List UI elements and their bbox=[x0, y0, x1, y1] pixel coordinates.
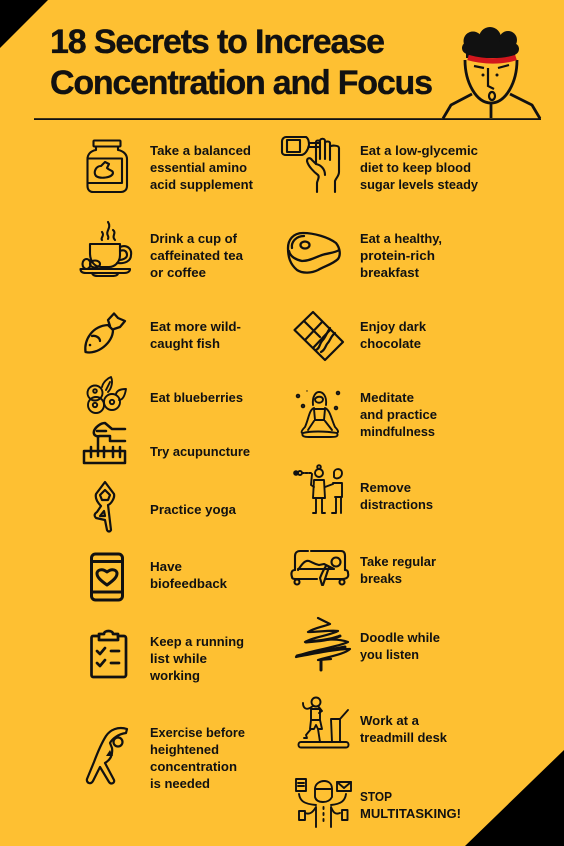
text: Work at a bbox=[360, 713, 420, 728]
text: diet to keep blood bbox=[360, 160, 471, 175]
icon: woman on treadmill bbox=[298, 698, 348, 748]
title: Concentration and Focus bbox=[50, 64, 433, 102]
corner triangle top left bbox=[0, 0, 48, 48]
tip: blueberries bbox=[88, 377, 243, 413]
tip: amino acid supplement bbox=[88, 140, 254, 192]
text: Drink a cup of bbox=[150, 231, 238, 246]
text: Practice yoga bbox=[150, 502, 237, 517]
text bbox=[360, 319, 427, 351]
icon: phone with heart bbox=[92, 554, 122, 600]
tip: dark chocolate bbox=[294, 312, 427, 360]
text: Eat blueberries bbox=[150, 390, 243, 405]
text: mindfulness bbox=[360, 424, 435, 439]
text: Enjoy dark bbox=[360, 319, 427, 334]
icon: tree pose figure bbox=[95, 482, 114, 532]
text: caffeinated tea bbox=[150, 248, 244, 263]
text: Keep a running bbox=[150, 634, 244, 649]
tip: doodle bbox=[296, 618, 440, 670]
text: and practice bbox=[360, 407, 437, 422]
text: concentration bbox=[150, 759, 237, 774]
text: Eat more wild- bbox=[150, 319, 241, 334]
icon: clipboard checklist bbox=[92, 631, 126, 677]
tip: stop multitasking bbox=[296, 779, 461, 827]
text: chocolate bbox=[360, 336, 421, 351]
text: MULTITASKING! bbox=[360, 806, 461, 821]
text bbox=[360, 713, 448, 745]
text: Take a balanced bbox=[150, 143, 251, 158]
tip: regular breaks bbox=[291, 551, 436, 586]
icon: bee and two people bbox=[293, 465, 342, 513]
text: list while bbox=[150, 651, 207, 666]
text bbox=[360, 554, 436, 586]
icon: blueberries bbox=[88, 377, 126, 413]
text bbox=[150, 143, 254, 192]
icon: chocolate bar bbox=[294, 312, 343, 360]
text bbox=[360, 390, 437, 439]
text: working bbox=[149, 668, 200, 683]
tip: meditate bbox=[297, 390, 437, 439]
text bbox=[360, 789, 461, 821]
text bbox=[360, 143, 479, 192]
text: heightened bbox=[150, 742, 219, 757]
text bbox=[150, 319, 241, 351]
text bbox=[149, 634, 244, 683]
tip: treadmill desk bbox=[298, 698, 448, 748]
text: sugar levels steady bbox=[360, 177, 479, 192]
text: Have bbox=[150, 559, 182, 574]
tip: running list bbox=[92, 631, 244, 683]
text: Take regular bbox=[360, 554, 436, 569]
text bbox=[150, 559, 228, 591]
title bbox=[50, 23, 433, 102]
text: or coffee bbox=[150, 265, 206, 280]
text: Try acupuncture bbox=[150, 444, 250, 459]
tip: low-glycemic diet bbox=[282, 137, 479, 192]
corner triangle bottom right bbox=[465, 750, 564, 846]
text: essential amino bbox=[150, 160, 247, 175]
icon: person on sofa bbox=[291, 551, 348, 585]
icon: acupuncture hand and needles bbox=[84, 423, 125, 463]
text: Eat a low-glycemic bbox=[360, 143, 478, 158]
text: acid supplement bbox=[150, 177, 254, 192]
icon: focused man with red headband bbox=[443, 27, 540, 118]
text: Exercise before bbox=[150, 725, 245, 740]
text bbox=[360, 231, 442, 280]
icon: fish bbox=[85, 314, 125, 352]
text: protein-rich bbox=[360, 248, 435, 263]
text: Meditate bbox=[360, 390, 414, 405]
text: distractions bbox=[360, 497, 433, 512]
title: 18 Secrets to Increase bbox=[50, 23, 385, 61]
icon: multitasking person with four arms bbox=[296, 779, 351, 827]
header rule bbox=[34, 118, 541, 120]
text: you listen bbox=[360, 647, 419, 662]
text: Doodle while bbox=[360, 630, 440, 645]
text bbox=[360, 480, 433, 512]
icon: coffee cup bbox=[80, 222, 131, 276]
text: Eat a healthy, bbox=[360, 231, 442, 246]
tip: caffeinated drink bbox=[80, 222, 244, 280]
tip: exercise bbox=[87, 725, 245, 791]
tip: acupuncture bbox=[84, 423, 250, 463]
text: Remove bbox=[360, 480, 411, 495]
icon: supplement jar bbox=[88, 140, 127, 192]
icon: scribble bbox=[296, 618, 350, 670]
text: caught fish bbox=[150, 336, 220, 351]
tip: biofeedback bbox=[92, 554, 228, 600]
text: STOP bbox=[360, 789, 392, 804]
tip: yoga bbox=[95, 482, 237, 532]
tip: wild-caught fish bbox=[85, 314, 241, 352]
text: treadmill desk bbox=[360, 730, 448, 745]
tip: remove distractions bbox=[293, 465, 433, 513]
text: breakfast bbox=[360, 265, 420, 280]
icon: stretching figure bbox=[87, 728, 127, 783]
icon: steak bbox=[288, 233, 340, 273]
icon: glucose meter and hand bbox=[282, 137, 339, 192]
text bbox=[360, 630, 440, 662]
text bbox=[150, 725, 245, 791]
text bbox=[150, 231, 244, 280]
text: biofeedback bbox=[150, 576, 228, 591]
text: is needed bbox=[150, 776, 210, 791]
tip: protein-rich breakfast bbox=[288, 231, 442, 280]
text: breaks bbox=[360, 571, 402, 586]
icon: meditating woman bbox=[297, 390, 339, 437]
